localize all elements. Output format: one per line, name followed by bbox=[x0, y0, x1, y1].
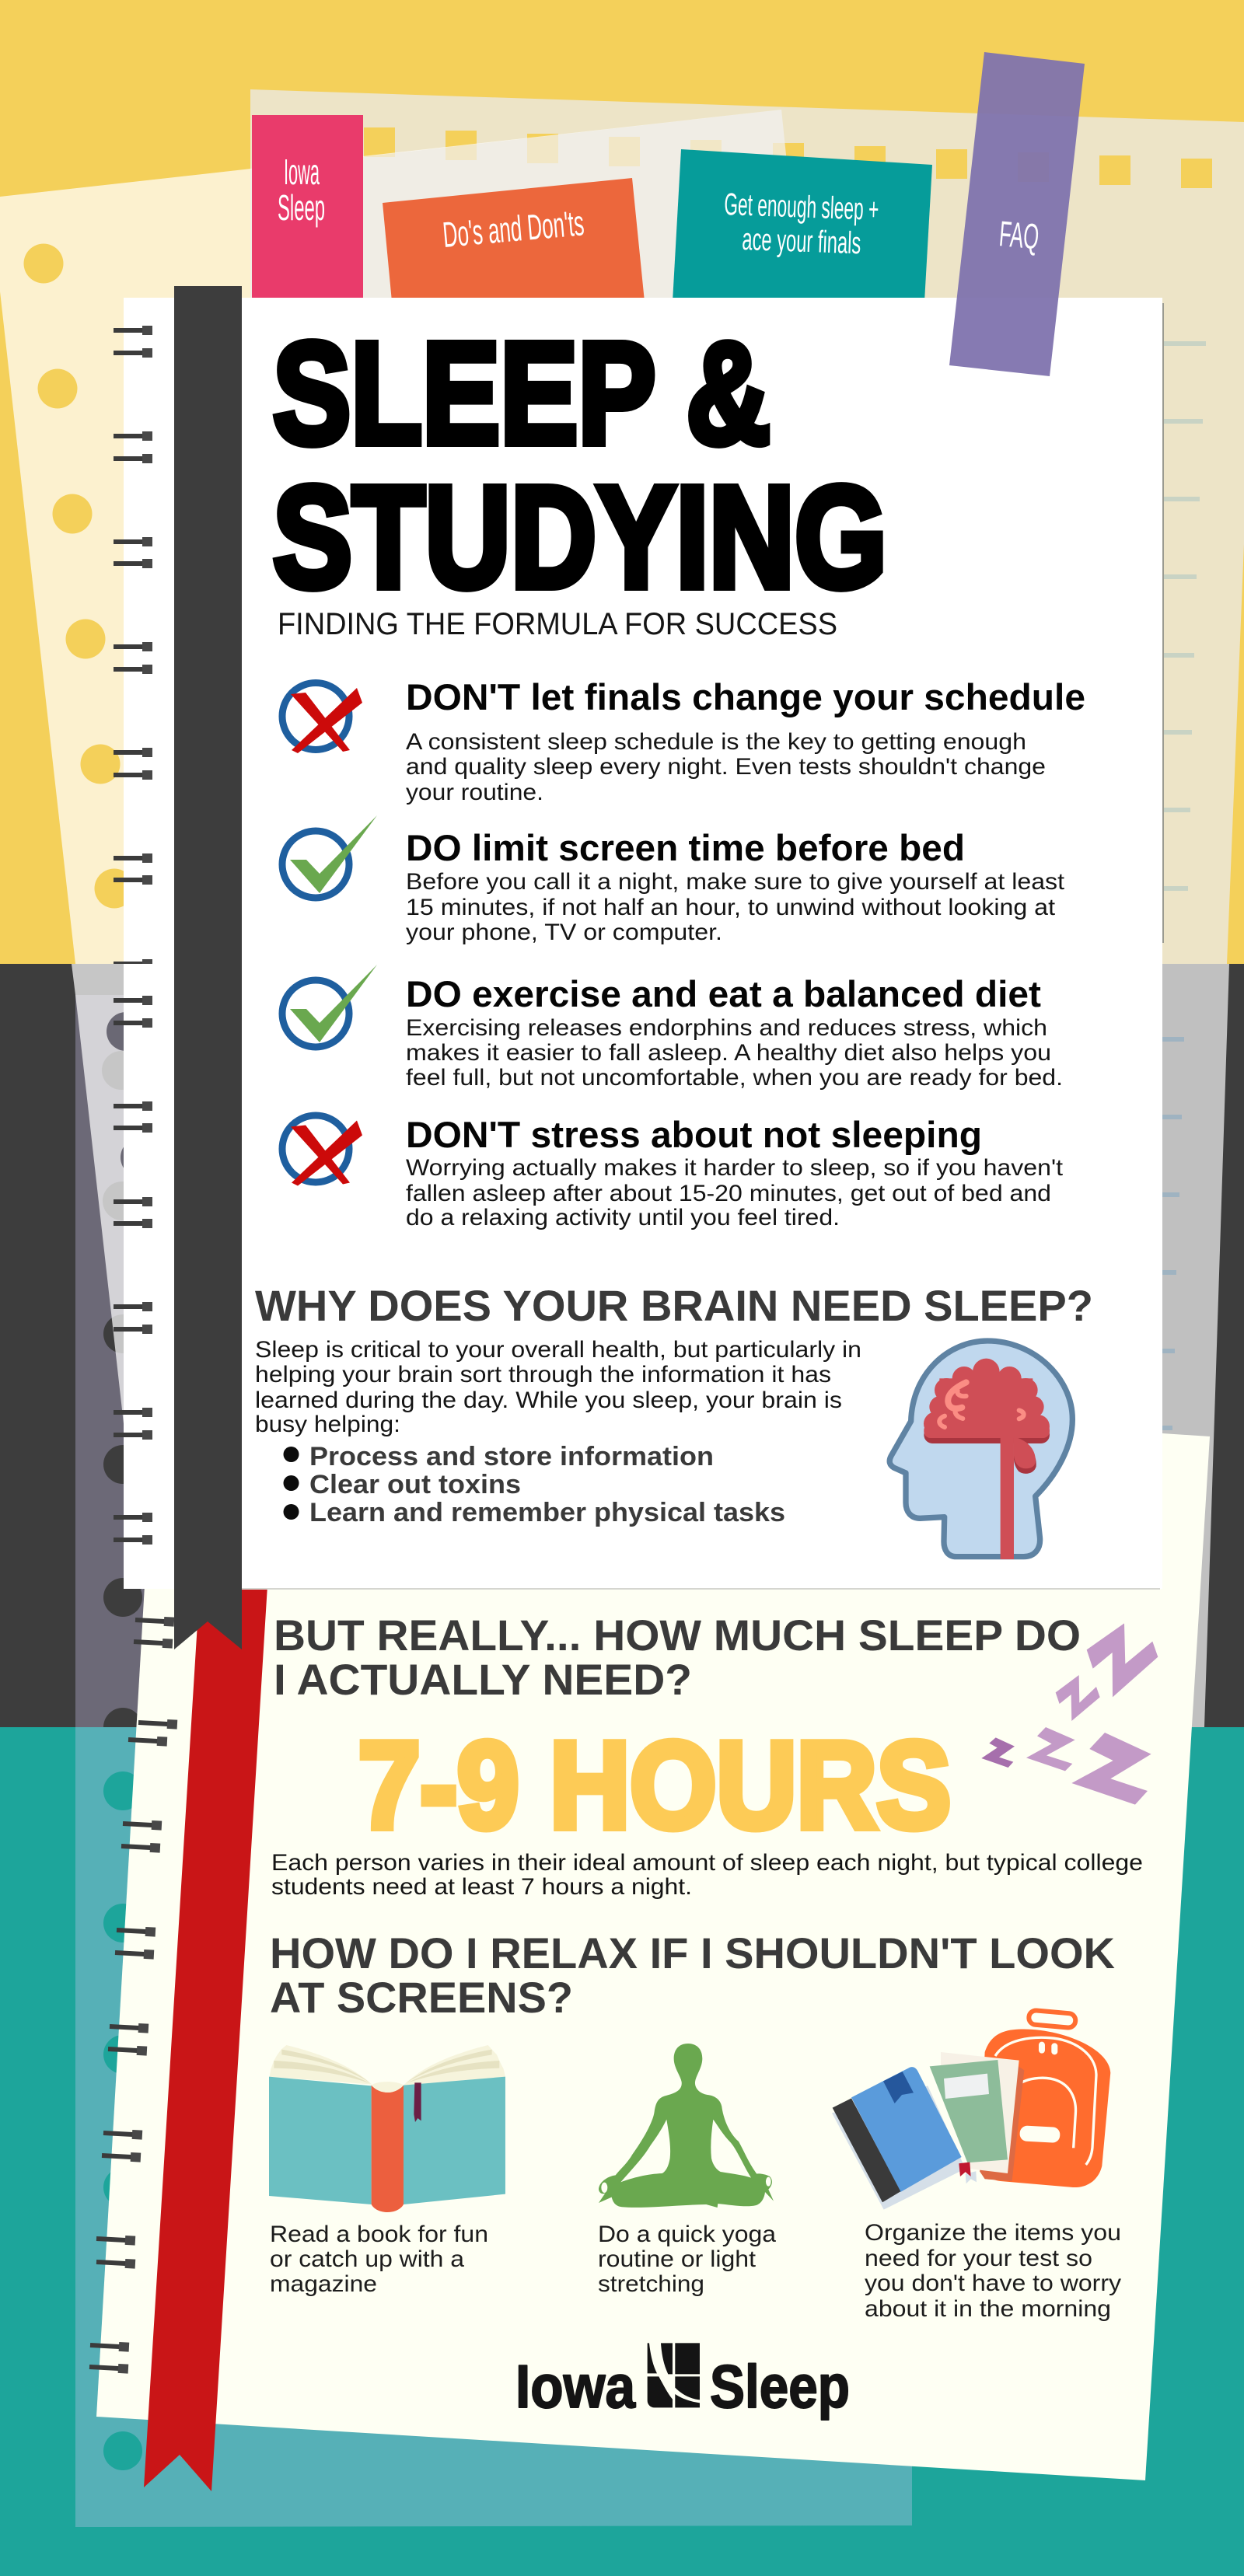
caption: book: Read a book for fun bbox=[270, 2222, 488, 2247]
logo: Iowa Sleep bbox=[515, 2343, 850, 2421]
caption: yoga: stretching bbox=[598, 2271, 704, 2297]
heading: how do I relax bbox=[270, 1929, 1115, 2022]
tab: Iowa Sleep: Sleep bbox=[278, 187, 325, 228]
tab: Iowa Sleep: Iowa bbox=[284, 152, 320, 192]
dark binding strip bbox=[174, 286, 242, 1649]
icon: backpack and books bbox=[832, 2010, 1110, 2210]
text block: brain explanation bbox=[255, 1337, 861, 1437]
text block: brain explanation: busy helping: bbox=[255, 1412, 400, 1437]
tab: Do's and Don'ts: Do's and Don'ts bbox=[441, 202, 585, 255]
right back paper with squares and ruled ticks bbox=[250, 89, 1244, 1727]
heading: how much sleep: I ACTUALLY NEED? bbox=[274, 1655, 692, 1704]
tab: Get enough sleep + ace your finals: Get enough sleep + bbox=[724, 187, 879, 227]
tip: limit screen time: your phone, TV or computer. bbox=[406, 920, 722, 945]
heading: how much sleep bbox=[274, 1611, 1081, 1704]
tab: Do's and Don'ts bbox=[383, 178, 645, 302]
title bbox=[273, 313, 887, 618]
caption: book: magazine bbox=[270, 2271, 377, 2297]
caption: organize: Organize the items you bbox=[865, 2220, 1121, 2246]
white page bbox=[124, 298, 1162, 1590]
subtitle: FINDING THE FORMULA FOR SUCCESS bbox=[278, 607, 837, 641]
heading: how do I relax: HOW DO I RELAX IF I SHOULDN'T LOOK bbox=[270, 1929, 1115, 1977]
big number: 7-9 hours: 7-9 HOURS bbox=[358, 1717, 951, 1854]
icon: red cross bbox=[282, 682, 362, 753]
tip: don't let finals change your schedule bbox=[282, 676, 1085, 805]
bullet list bbox=[283, 1442, 785, 1527]
lilac back paper with punched holes bbox=[75, 995, 912, 2527]
bullet list: Process and store information bbox=[309, 1442, 714, 1471]
tab: Iowa Sleep bbox=[252, 115, 363, 302]
heading: why does your brain need sleep: WHY DOES YOUR BRAIN NEED SLEEP? bbox=[255, 1281, 1093, 1330]
title: SLEEP & bbox=[273, 313, 771, 474]
text block: brain explanation: helping your brain sort through the information it has bbox=[255, 1362, 831, 1387]
tip: don't stress: Worrying actually makes it harder to sleep, so if you haven't bbox=[406, 1155, 1064, 1181]
tip: don't stress: DON'T stress about not sleeping bbox=[406, 1114, 982, 1155]
tilted cream paper bbox=[96, 1433, 1210, 2480]
caption: book bbox=[270, 2222, 488, 2297]
text block: brain explanation: learned during the day. While you sleep, your brain is bbox=[255, 1387, 842, 1413]
logo: Iowa Sleep: Iowa bbox=[515, 2352, 636, 2421]
tip: exercise and diet: Exercising releases endorphins and reduces stress, which bbox=[406, 1015, 1047, 1041]
heading: how much sleep: BUT REALLY... HOW MUCH SLEEP DO bbox=[274, 1611, 1081, 1660]
caption: yoga: routine or light bbox=[598, 2246, 757, 2272]
tip: don't let finals change your schedule: and quality sleep every night. Even tests shouldn't change bbox=[406, 754, 1046, 780]
tip: limit screen time: DO limit screen time before bed bbox=[406, 827, 965, 868]
icon: green check bbox=[282, 815, 377, 898]
tip: don't stress bbox=[282, 1114, 1064, 1230]
tip: don't let finals change your schedule: your routine. bbox=[406, 780, 543, 805]
tip: limit screen time bbox=[282, 815, 1065, 945]
title: STUDYING bbox=[273, 457, 887, 618]
text block: brain explanation: Sleep is critical to your overall health, but particularly in bbox=[255, 1337, 861, 1363]
caption: yoga: Do a quick yoga bbox=[598, 2222, 776, 2247]
bullet list: Learn and remember physical tasks bbox=[309, 1498, 785, 1527]
heading: how do I relax: AT SCREENS? bbox=[270, 1973, 573, 2022]
caption: organize: need for your test so bbox=[865, 2246, 1092, 2271]
caption: yoga bbox=[598, 2222, 776, 2297]
tip: don't stress: fallen asleep after about 15-20 minutes, get out of bed and bbox=[406, 1181, 1051, 1206]
tip: don't let finals change your schedule: A consistent sleep schedule is the key to getting enough bbox=[406, 729, 1026, 755]
caption: organize: about it in the morning bbox=[865, 2296, 1111, 2322]
tip: don't let finals change your schedule: DON'T let finals change your schedule bbox=[406, 676, 1085, 717]
left translucent paper with punched holes bbox=[0, 110, 801, 1590]
tip: exercise and diet bbox=[282, 965, 1063, 1091]
caption: book: or catch up with a bbox=[270, 2246, 464, 2272]
text block: ideal amount: Each person varies in their ideal amount of sleep each night, but typical college bbox=[271, 1850, 1143, 1876]
tip: don't stress: do a relaxing activity until you feel tired. bbox=[406, 1205, 840, 1230]
caption: organize bbox=[865, 2220, 1121, 2322]
tip: exercise and diet: DO exercise and eat a balanced diet bbox=[406, 973, 1041, 1014]
icon: head with brain bbox=[889, 1341, 1072, 1559]
purple tab: FAQ bbox=[949, 52, 1085, 376]
tab: Get enough sleep + ace your finals bbox=[673, 149, 932, 302]
tab: Get enough sleep + ace your finals: ace your finals bbox=[742, 222, 861, 260]
tip: limit screen time: 15 minutes, if not half an hour, to unwind without looking at bbox=[406, 895, 1056, 920]
text block: ideal amount: students need at least 7 hours a night. bbox=[271, 1874, 692, 1900]
caption: organize: you don't have to worry bbox=[865, 2271, 1121, 2296]
bullet list: Clear out toxins bbox=[309, 1470, 521, 1499]
logo: Iowa Sleep: Sleep bbox=[710, 2352, 850, 2421]
tip: exercise and diet: feel full, but not uncomfortable, when you are ready for bed. bbox=[406, 1065, 1063, 1091]
spiral rings bbox=[89, 326, 177, 2374]
icon: zzz bbox=[981, 1623, 1158, 1805]
text block: ideal amount bbox=[271, 1850, 1143, 1900]
icon: red cross bbox=[282, 1115, 362, 1186]
icon: open book bbox=[269, 2045, 505, 2212]
icon: green check bbox=[282, 965, 377, 1047]
tip: exercise and diet: makes it easier to fall asleep. A healthy diet also helps you bbox=[406, 1040, 1051, 1066]
purple tab: FAQ: FAQ bbox=[998, 213, 1040, 257]
tip: limit screen time: Before you call it a night, make sure to give yourself at least bbox=[406, 869, 1065, 895]
red bookmark ribbon bbox=[144, 1586, 267, 2491]
icon: yoga figure bbox=[599, 2044, 774, 2208]
icon: logo mark bbox=[648, 2343, 700, 2407]
